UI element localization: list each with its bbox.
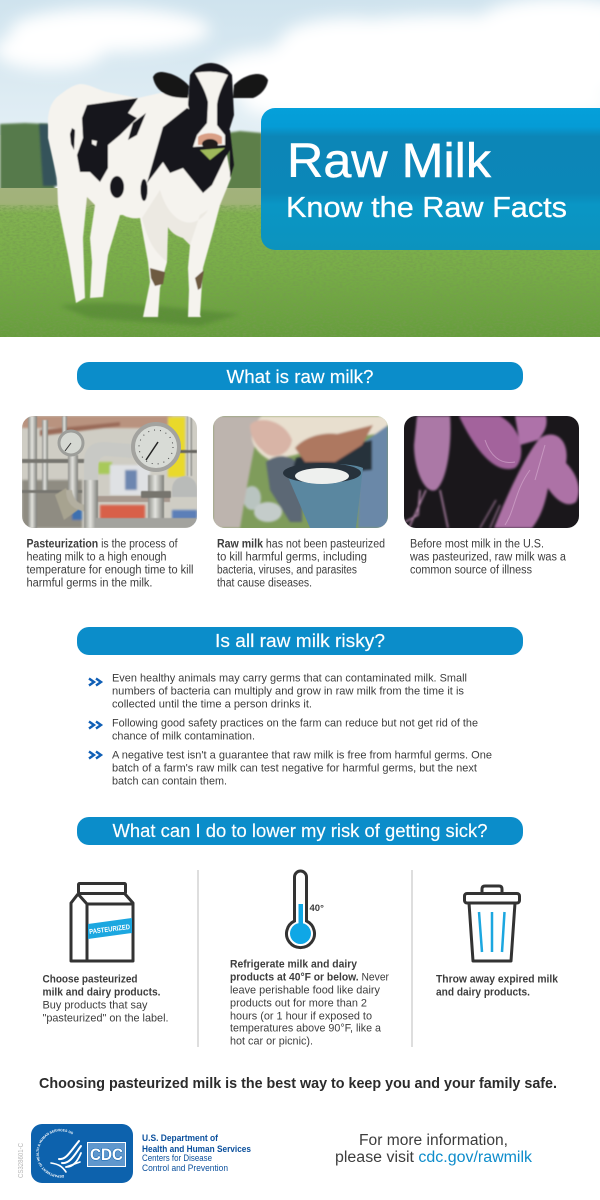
photo: bacteria under microscope	[404, 416, 579, 530]
text: refrigerate: Refrigerate milk and dairy	[230, 958, 358, 970]
logo: HHS and CDC	[31, 1124, 133, 1183]
text: choose pasteurized	[42, 974, 168, 1024]
bullet 1	[89, 672, 467, 710]
text: history of raw milk illness: was pasteurized, raw milk was a	[409, 552, 567, 564]
text: raw milk: to kill harmful germs, including	[217, 552, 367, 564]
text: throw away: Throw away expired milk	[436, 974, 559, 986]
text: refrigerate: hours (or 1 hour if exposed to	[230, 1010, 372, 1022]
text: choose pasteurized: milk and dairy products.	[42, 986, 160, 998]
text: pasteurization: harmful germs in the milk.	[26, 578, 152, 590]
icon: trash can	[464, 886, 520, 961]
subtitle: Know the Raw Facts	[286, 192, 567, 224]
heading: lower my risk: What can I do to lower my risk of getting sick?	[112, 821, 488, 841]
text: refrigerate: products at 40°F or below. Never	[230, 972, 389, 984]
bullet 1: numbers of bacteria can multiply and grow in raw milk from the time it is	[112, 686, 464, 698]
text: refrigerate: leave perishable food like dairy	[230, 984, 380, 996]
bullet 3	[89, 750, 492, 788]
text: refrigerate: hot car or picnic).	[230, 1036, 313, 1048]
ears	[153, 72, 189, 98]
cow	[48, 63, 268, 317]
neck patch	[147, 108, 234, 193]
department name	[142, 1133, 251, 1173]
cow body	[48, 84, 231, 317]
text: raw milk: Raw milk has not been pasteurized	[217, 538, 385, 550]
department name: Centers for Disease	[142, 1153, 212, 1163]
department name: Control and Prevention	[142, 1163, 228, 1173]
hero photo: cow in a field	[0, 0, 600, 337]
title: Raw Milk	[287, 135, 492, 188]
text: history of raw milk illness: Before most milk in the U.S.	[410, 538, 544, 550]
icon: milk carton: PASTEURIZED	[89, 924, 130, 936]
CDC mark: CDC	[90, 1145, 123, 1164]
text: pasteurization: Pasteurization is the process of	[26, 538, 178, 550]
call to action: For more information,	[359, 1132, 508, 1149]
photo: pasteurization equipment	[22, 416, 197, 528]
sky with clouds	[0, 0, 600, 135]
heading: is all raw milk risky: Is all raw milk risky?	[215, 631, 385, 651]
bullet list: raw milk risks	[89, 672, 492, 788]
department name: U.S. Department of	[142, 1133, 219, 1143]
photo: milking a cow into a bucket	[213, 416, 388, 528]
bullet 2: chance of milk contamination.	[112, 730, 255, 742]
bullet 3: batch of a farm's raw milk can test negative for harmful germs, but the next	[112, 762, 477, 774]
bullet 3: batch can contain them.	[112, 776, 227, 788]
bullet 1: collected until the time a person drinks it.	[112, 698, 312, 710]
publication code: CS328601-C	[18, 1143, 25, 1178]
key message: Choosing pasteurized milk is the best way to keep you and your family safe.	[39, 1075, 557, 1092]
heading: what is raw milk	[77, 362, 523, 390]
bullet 3: A negative test isn't a guarantee that raw milk is free from harmful germs. One	[112, 750, 492, 762]
shoulder patch	[77, 98, 138, 182]
text: raw milk	[217, 538, 385, 590]
tree line	[0, 123, 262, 190]
text: choose pasteurized: Buy products that say	[42, 1000, 148, 1012]
text: choose pasteurized: Choose pasteurized	[42, 974, 138, 986]
bullet 1: Even healthy animals may carry germs that can contaminated milk. Small	[112, 672, 467, 684]
text: history of raw milk illness: common source of illness	[410, 564, 532, 576]
text: raw milk: that cause diseases.	[217, 578, 312, 590]
call to action	[335, 1132, 532, 1166]
text: throw away: and dairy products.	[436, 986, 530, 998]
gauges	[59, 424, 179, 470]
heading: is all raw milk risky	[77, 627, 523, 655]
heading: what is raw milk: What is raw milk?	[226, 367, 374, 387]
text: pasteurization: temperature for enough time to kill	[26, 564, 194, 576]
department name: Health and Human Services	[142, 1144, 251, 1154]
text: history of raw milk illness	[409, 538, 567, 576]
text: refrigerate	[230, 958, 389, 1048]
icon: thermometer	[286, 871, 324, 948]
text: raw milk: bacteria, viruses, and parasites	[217, 564, 357, 576]
knees	[150, 268, 165, 286]
head	[188, 63, 234, 137]
title box	[261, 108, 600, 250]
temperature label: 40°	[310, 903, 324, 914]
bullet 2: Following good safety practices on the farm can reduce but not get rid of the	[112, 718, 478, 730]
text: throw away	[436, 974, 559, 998]
text: refrigerate: products out for more than 2	[230, 998, 367, 1010]
text: refrigerate: temperatures above 90°F, like a	[230, 1022, 382, 1034]
bullet 2	[89, 718, 478, 742]
grass	[0, 188, 600, 337]
eagle mark	[51, 1141, 81, 1172]
text: pasteurization: heating milk to a high enough	[26, 552, 166, 564]
call to action: please visit cdc.gov/rawmilk	[335, 1149, 532, 1166]
heading: lower my risk	[77, 817, 523, 845]
logo: HHS and CDC: DEPARTMENT OF HEALTH & HUMAN SERVICES USA	[36, 1128, 74, 1178]
text: choose pasteurized: "pasteurized" on the label.	[42, 1012, 168, 1024]
text: pasteurization	[26, 538, 194, 590]
icon: milk carton	[71, 884, 133, 961]
